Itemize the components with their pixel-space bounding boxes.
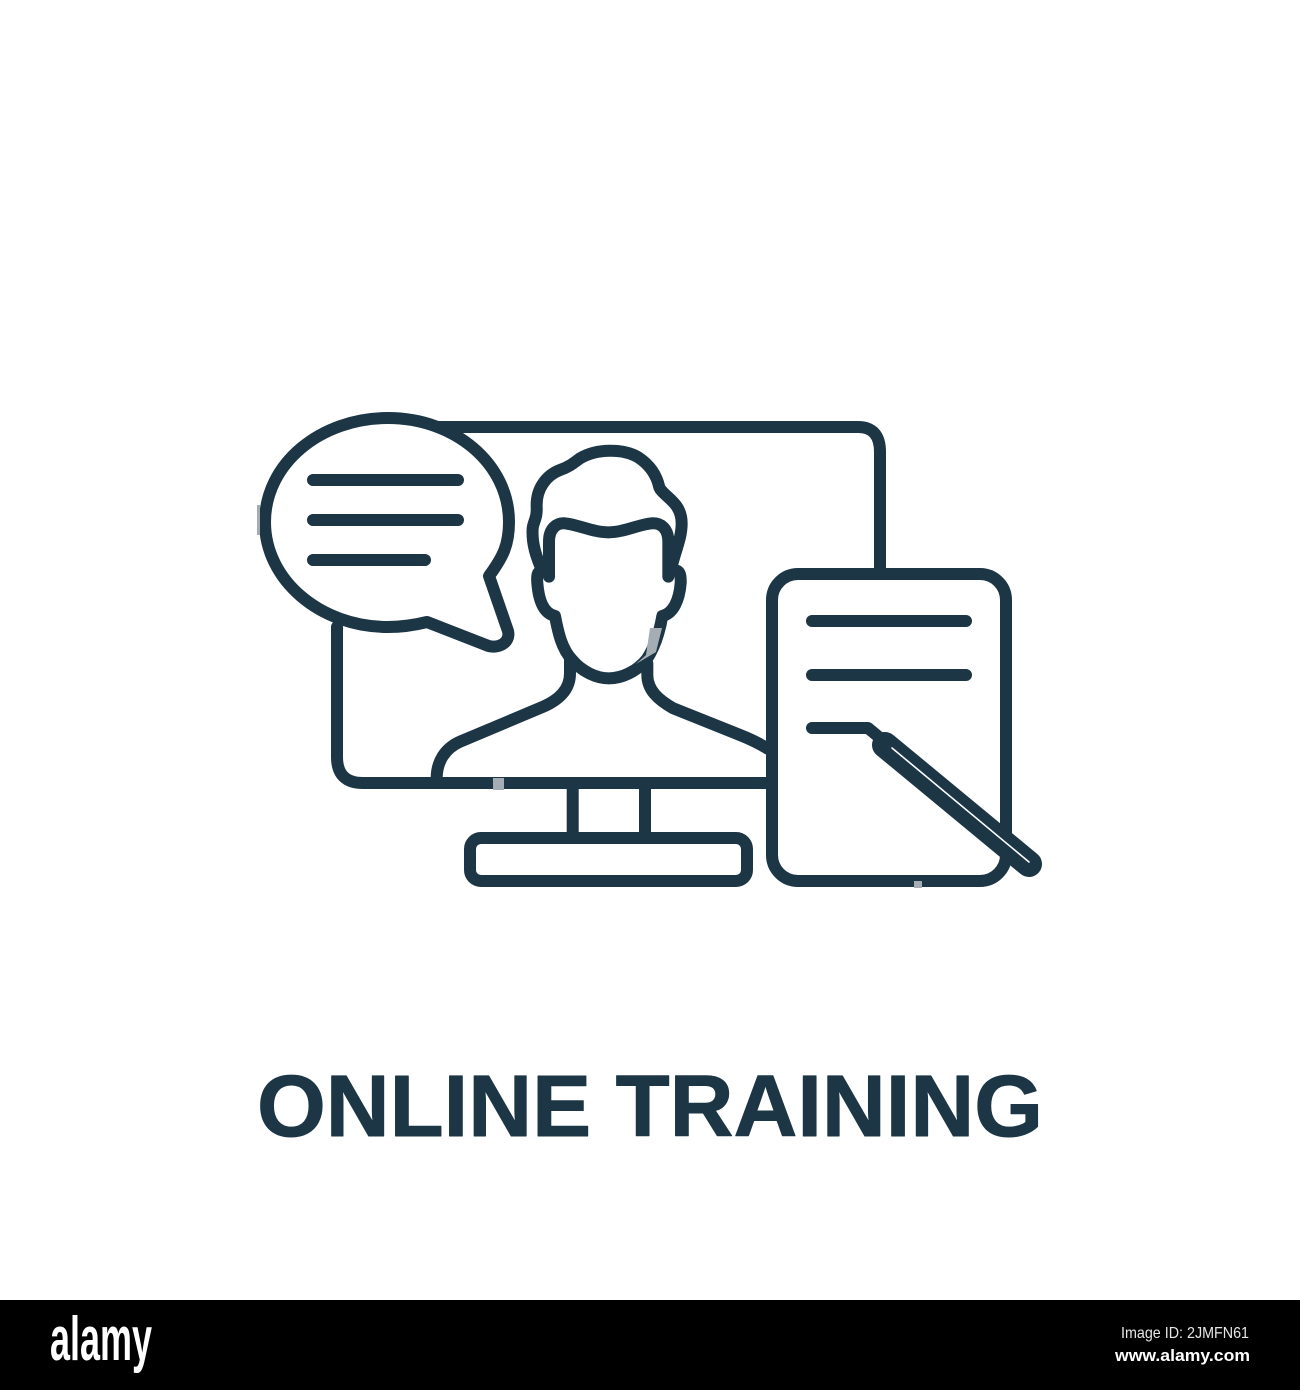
image id: Image ID: 2JMFN61 <box>1121 1325 1249 1342</box>
icon: pen <box>885 745 1029 864</box>
hairline and temples <box>549 523 668 577</box>
footer bar <box>0 1300 1300 1390</box>
website: www.alamy.com <box>1114 1346 1250 1365</box>
icon: document with lines <box>772 574 1006 881</box>
watermark logo: alamy <box>50 1305 152 1374</box>
icon: online training illustration <box>265 418 1029 881</box>
icon: person <box>437 451 767 778</box>
face and ears <box>537 571 681 678</box>
icon: monitor screen <box>337 427 880 783</box>
bubble text lines <box>313 480 458 560</box>
icon: speech bubble <box>265 418 509 647</box>
watermark traces <box>257 505 922 888</box>
hair outline <box>533 451 682 572</box>
title: ONLINE TRAINING <box>257 1058 1043 1155</box>
icon: monitor stand <box>470 783 747 881</box>
neck and shoulders <box>437 658 767 778</box>
